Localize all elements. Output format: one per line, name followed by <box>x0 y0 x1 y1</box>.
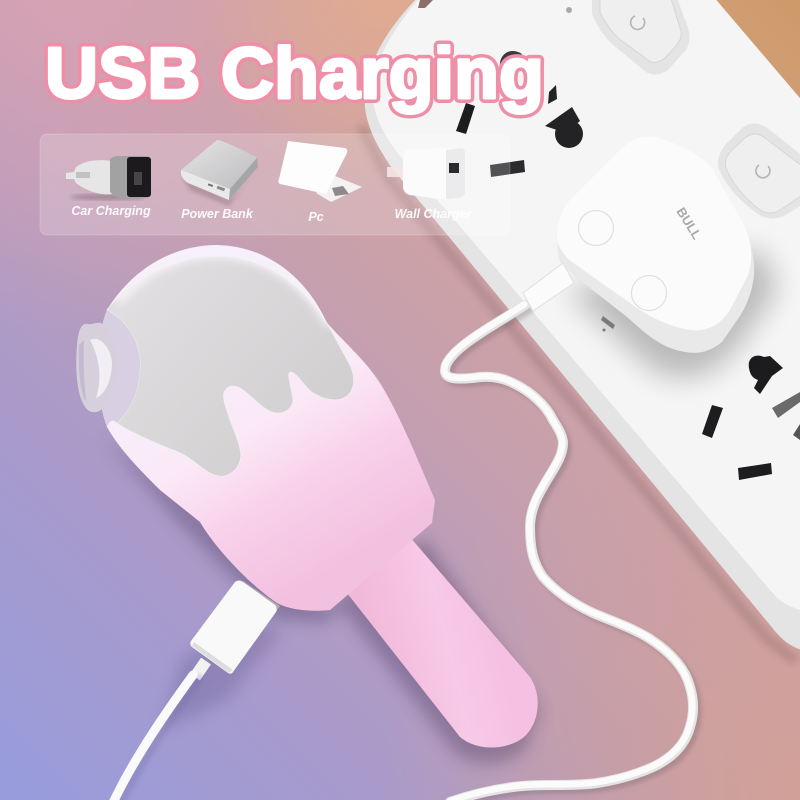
USB cable at toy <box>112 661 206 800</box>
socket: lower left slot <box>702 405 723 438</box>
socket: right slot <box>772 392 800 418</box>
toy suction collar <box>98 310 140 427</box>
cable connector at charger <box>523 263 574 311</box>
switch: right <box>718 123 800 219</box>
toy frosted cap <box>107 256 354 476</box>
charger side ports <box>601 316 615 332</box>
popsicle toy <box>76 245 540 763</box>
icon: power bank <box>181 140 258 206</box>
toy rim glow <box>118 254 330 325</box>
icon: car charger <box>66 156 151 200</box>
toy stick <box>347 537 538 748</box>
label: power bank: Power Bank <box>181 207 254 221</box>
title: USB Charging <box>45 34 544 114</box>
icon: laptop <box>278 141 362 202</box>
strip top notch <box>418 0 433 8</box>
label: wall charger: Wall Charger <box>395 207 473 221</box>
socket: upper earth hole <box>500 51 583 148</box>
socket: upper lower slot <box>490 160 525 177</box>
label: pc: Pc <box>308 210 324 224</box>
toy shadow <box>102 435 540 763</box>
socket: lower earth hole <box>749 356 783 394</box>
charger buttons <box>578 210 614 246</box>
title: USB Charging <box>45 34 544 114</box>
charger plug <box>557 137 777 377</box>
power strip <box>361 0 800 661</box>
toy body <box>98 245 435 611</box>
panel: compatible chargers <box>40 134 510 235</box>
strip indicator dot <box>566 7 572 13</box>
charger brand: BULL <box>673 205 705 242</box>
icon: wall charger <box>387 148 465 199</box>
socket: upper left slot <box>456 103 475 134</box>
socket: lower slot <box>738 463 772 480</box>
label: car charging: Car Charging <box>71 204 151 218</box>
power cable <box>444 304 697 800</box>
switch: top <box>592 0 690 75</box>
USB-C connector at toy <box>162 580 282 730</box>
toy suction nozzle <box>76 323 117 412</box>
